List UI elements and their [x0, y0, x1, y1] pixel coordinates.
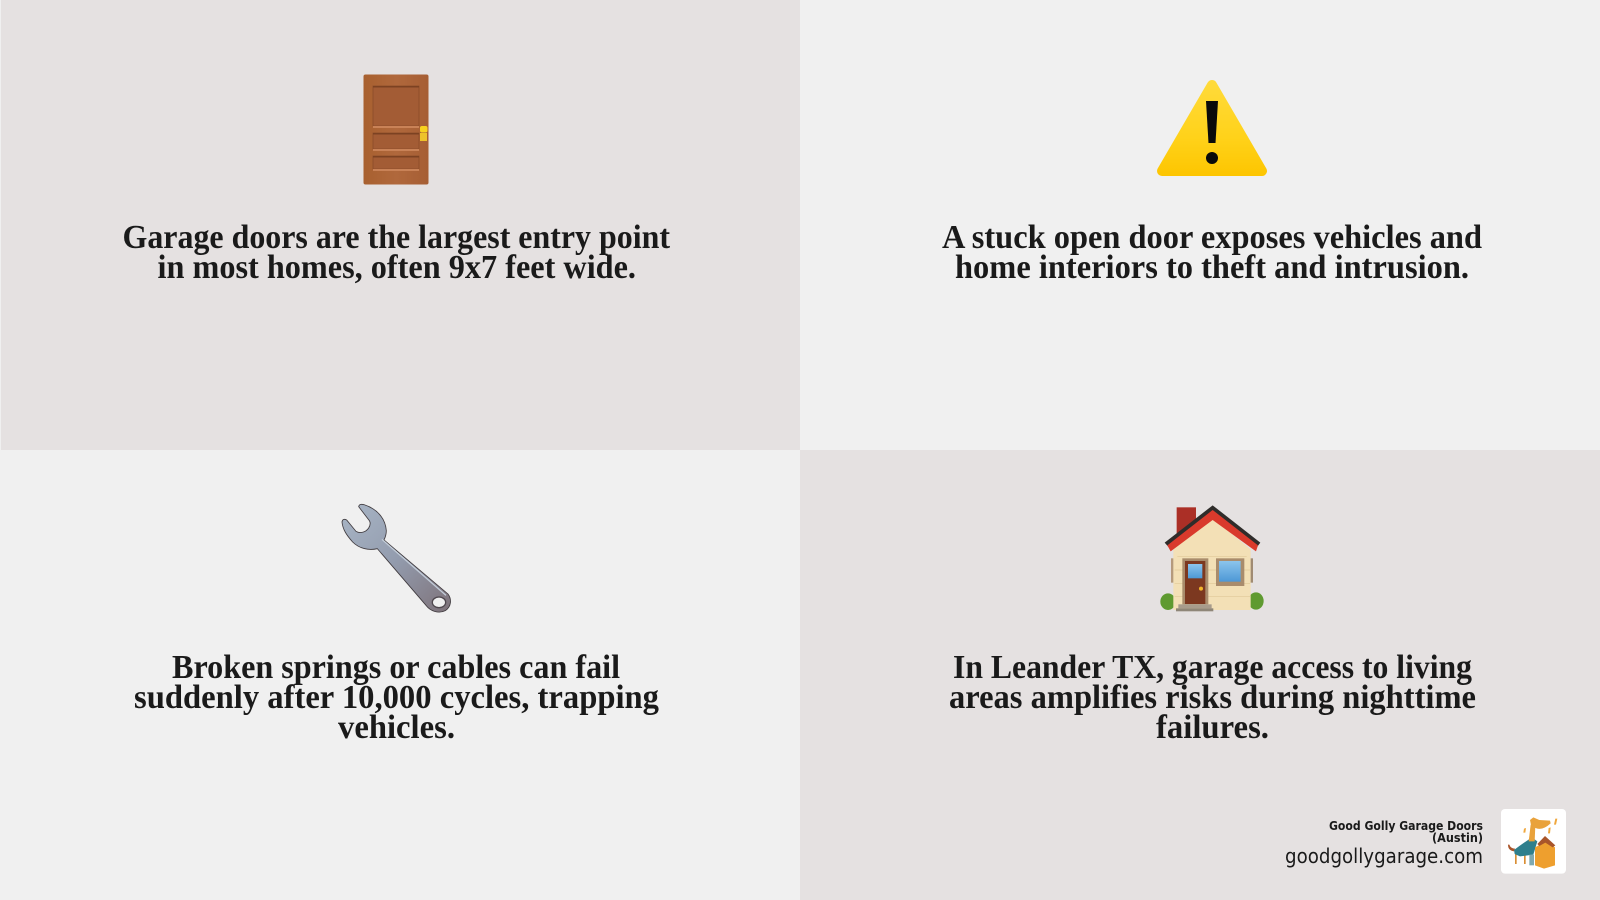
heading: Leander risks: [949, 649, 1476, 746]
heading: stuck door: [942, 219, 1482, 286]
footer: brand text: Good Golly Garage Doors: [1329, 819, 1483, 833]
heading: Leander risks: failures.: [1156, 709, 1269, 746]
heading: Leander risks: In Leander TX, garage access to living: [953, 649, 1472, 686]
footer: brand text: [1285, 819, 1483, 868]
icon: warning sign: [1162, 85, 1262, 171]
panel: broken springs: [0, 450, 800, 900]
heading: garage doors: in most homes, often 9x7 feet wide.: [158, 249, 636, 286]
icon: wrench: [342, 504, 451, 612]
heading: broken springs: suddenly after 10,000 cycles, trapping: [134, 679, 659, 716]
heading: garage doors: [122, 219, 671, 286]
heading: Leander risks: areas amplifies risks during nighttime: [949, 679, 1476, 716]
heading: stuck door: home interiors to theft and intrusion.: [955, 249, 1469, 286]
icon: door: [364, 74, 428, 184]
panel: garage door entry point: [0, 0, 800, 450]
heading: broken springs: vehicles.: [338, 709, 455, 746]
heading: stuck door: A stuck open door exposes vehicles and: [942, 219, 1482, 256]
heading: broken springs: Broken springs or cables can fail: [172, 649, 620, 686]
icon: house: [1160, 505, 1264, 611]
heading: garage doors: Garage doors are the largest entry point: [122, 219, 671, 256]
heading: broken springs: [134, 649, 659, 746]
panel: Leander TX: [800, 450, 1600, 900]
footer: brand text: goodgollygarage.com: [1285, 844, 1483, 868]
panel: stuck open door: [800, 0, 1600, 450]
footer: brand text: (Austin): [1432, 831, 1483, 845]
logo: giraffe with garage: [1501, 809, 1566, 874]
